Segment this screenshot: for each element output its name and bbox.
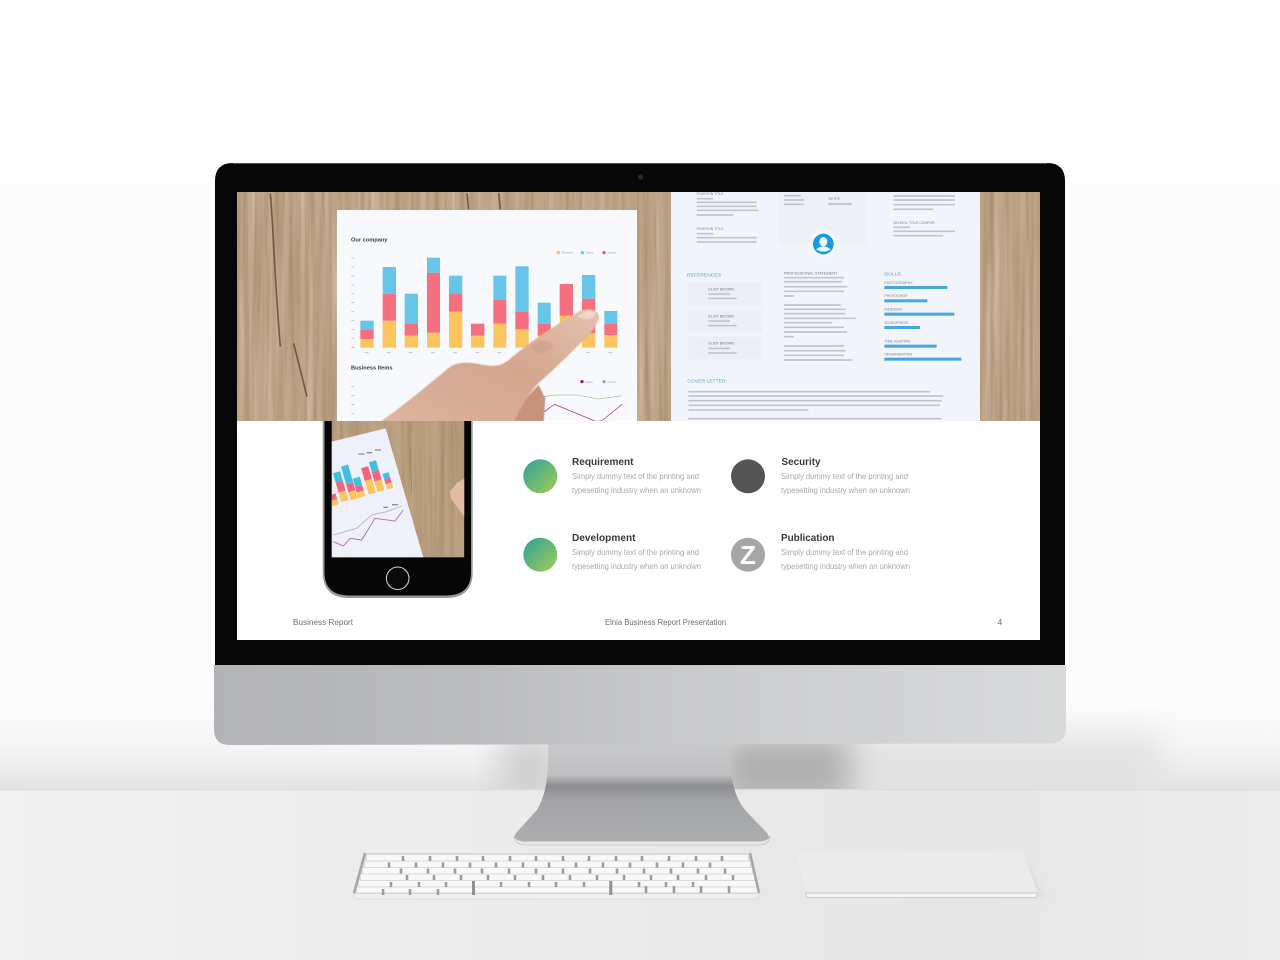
phone screen photo <box>329 421 464 557</box>
feature: publication: typesetting industry when an unknown <box>781 562 910 571</box>
skill labels: ORGANISATION <box>884 353 912 357</box>
line chart legend: Sales <box>585 380 593 384</box>
line chart <box>351 387 622 422</box>
screen <box>237 190 1040 640</box>
wood cracks <box>270 193 500 397</box>
feature: publication <box>731 532 910 572</box>
reference names <box>708 287 734 346</box>
monitor body <box>214 163 1066 745</box>
section headings: REFERENCES <box>687 273 722 279</box>
wall and desk background <box>0 717 1280 960</box>
feature: publication: Z <box>740 540 756 570</box>
feature: publication: Publication <box>781 532 834 544</box>
skill labels: TIME KEEPING <box>884 340 910 344</box>
chart legend <box>556 251 616 254</box>
hero photo of charts on wood desk <box>237 190 1040 423</box>
chart legend: Receipts <box>562 251 574 255</box>
stacked bar chart <box>360 258 617 348</box>
line chart legend: Orders <box>607 380 617 384</box>
feature: requirement: Simply dummy text of the printing and <box>572 472 699 481</box>
phone home button <box>386 567 409 590</box>
feature: development <box>523 532 701 572</box>
footer: 4 <box>998 617 1002 627</box>
feature: security: typesetting industry when an unknown <box>781 486 910 495</box>
feature: security: Security <box>782 456 821 468</box>
keyboard <box>353 853 759 899</box>
skill labels: PHOTOGRAPHY <box>884 281 913 285</box>
feature: security <box>731 456 910 495</box>
position titles: POSITION TITLE <box>697 227 724 231</box>
feature: requirement <box>523 456 701 495</box>
section headings <box>687 271 902 384</box>
chart paper: our company <box>337 210 637 423</box>
feature: security: Simply dummy text of the printing and <box>781 472 908 481</box>
skill labels <box>884 281 913 357</box>
phone mockup <box>322 421 473 598</box>
section headings: COVER LETTER <box>687 378 726 384</box>
footer: Elnia Business Report Presentation <box>605 617 726 627</box>
reference names: ELIOT BROWN <box>708 314 734 318</box>
footer: Business Report <box>293 617 354 627</box>
position titles: SKYPE <box>828 197 841 201</box>
skill labels: PHOTOSHOP <box>884 294 908 298</box>
chart axis ticks <box>351 258 612 353</box>
resume body lines <box>697 196 955 360</box>
feature: requirement: typesetting industry when an unknown <box>572 486 701 495</box>
avatar icon <box>813 234 834 254</box>
chart legend: Sales <box>586 251 594 255</box>
reference names: ELIOT BROWN <box>708 287 734 291</box>
feature: development: Simply dummy text of the printing and <box>572 548 699 557</box>
business items heading: Business Items <box>351 366 392 372</box>
feature: requirement: Requirement <box>572 456 634 468</box>
feature: publication: Simply dummy text of the printing and <box>781 548 908 557</box>
resume paper: PROFESSIONAL STATEMENT <box>784 271 838 275</box>
trackpad <box>797 852 1046 898</box>
chart title: Our company <box>351 238 388 244</box>
line chart legend <box>580 380 616 384</box>
skill labels: INDESIGN <box>884 307 902 311</box>
monitor stand <box>514 743 770 845</box>
position titles: POSITION TITLE <box>697 192 724 196</box>
position titles: SCHOOL TITLE CORPOR <box>893 221 935 225</box>
feature: development: typesetting industry when an unknown <box>572 562 701 571</box>
pointing hand <box>380 309 599 422</box>
footer <box>293 617 1002 627</box>
chart legend: Orders <box>607 251 617 255</box>
camera dot <box>638 174 643 180</box>
reference names: ELIOT BROWN <box>708 342 734 346</box>
resume top panel <box>778 193 867 243</box>
resume paper <box>671 190 980 423</box>
monitor silver chin <box>214 665 1066 745</box>
reference cards <box>688 283 762 305</box>
position titles <box>697 192 935 231</box>
feature: development: Development <box>572 532 636 544</box>
section headings: SKILLS <box>884 271 902 277</box>
skill labels: WORDPRESS <box>884 321 909 325</box>
skill bars <box>884 286 961 361</box>
